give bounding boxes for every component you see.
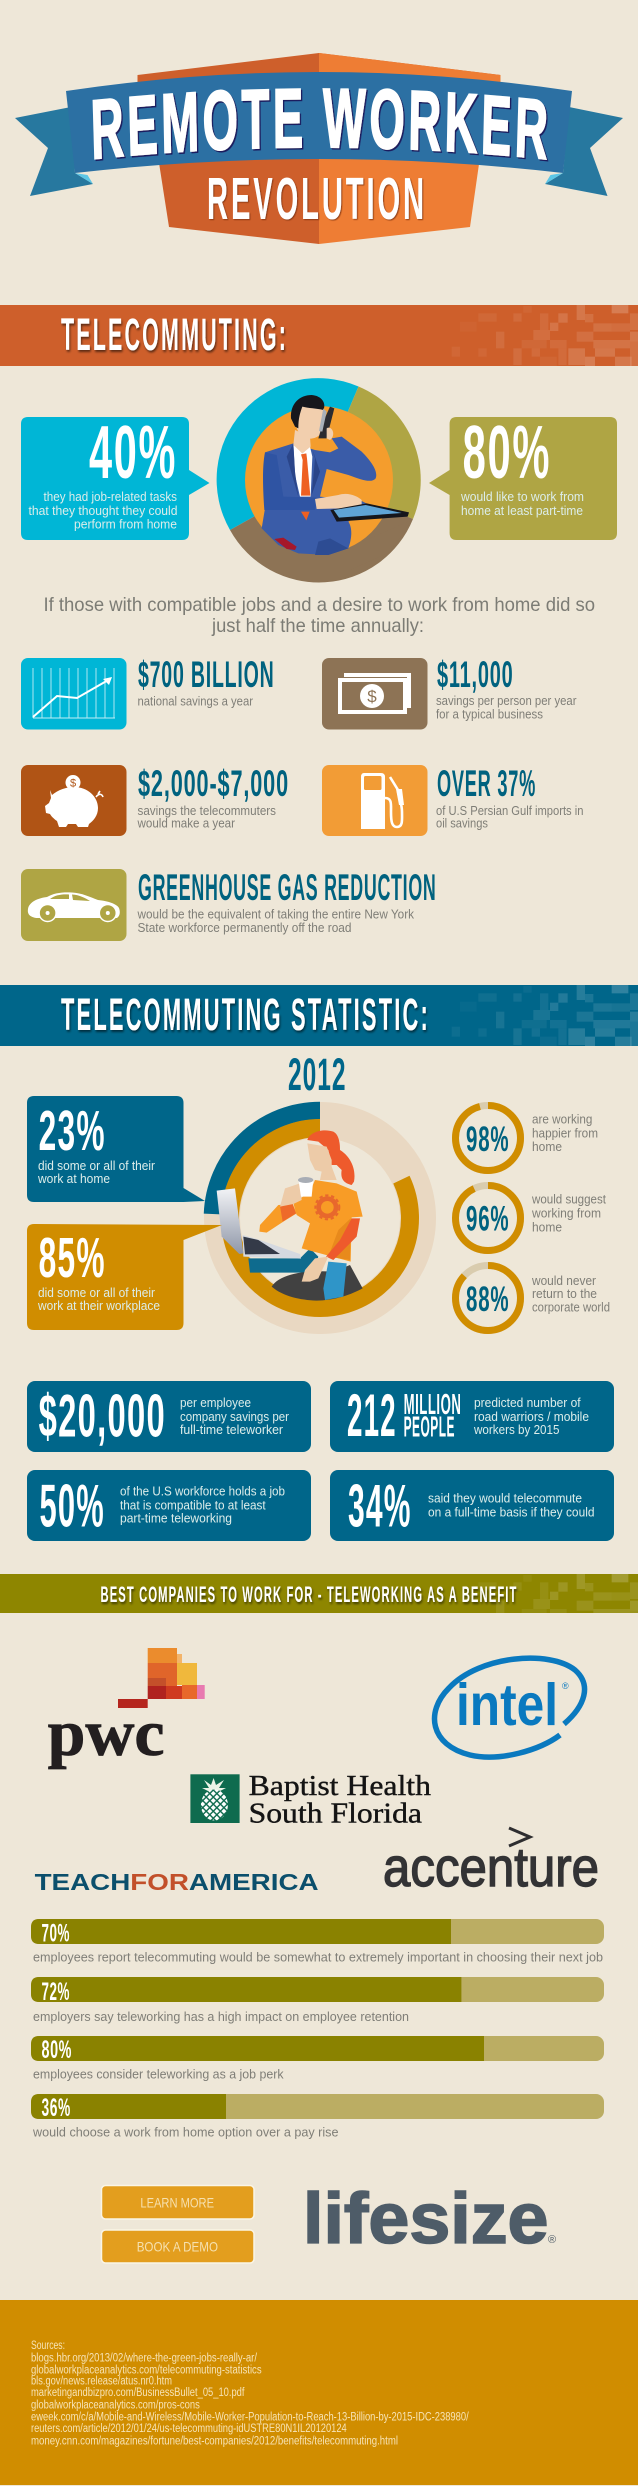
stat box: $20,000: per employee: [180, 1396, 251, 1410]
callout: 85%: work at their workplace: [37, 1299, 160, 1313]
section band: telecommuting statistic: [0, 985, 638, 1046]
bar: 36%: would choose a work from home option over a pay rise: [32, 2126, 339, 2140]
bar: 70%: 70%: [42, 1920, 70, 1948]
stat: $2,000-$7,000: [21, 763, 289, 836]
small donut: 96%: 96%: [466, 1200, 509, 1238]
icon: piggy bank: [21, 765, 126, 836]
small donut: 98%: home: [532, 1140, 562, 1154]
callout: 85%: [27, 1224, 222, 1330]
logo: lifesize: lifesize: [303, 2180, 548, 2259]
ribbon body: [66, 72, 572, 173]
icon: car: [21, 869, 126, 941]
stat: greenhouse gas reduction: [21, 867, 436, 941]
stat: $700 billion: [21, 654, 274, 730]
small donut: 96%: working from: [531, 1206, 601, 1220]
small donut: 96%: [456, 1186, 606, 1250]
stat box: 212 million people: PEOPLE: [404, 1412, 455, 1444]
icon: gas pump: [322, 765, 428, 836]
callout: 85%: did some or all of their: [38, 1286, 155, 1300]
small donut: 98%: 98%: [466, 1120, 509, 1159]
logo: pwc: [48, 1648, 205, 1770]
stat box: 50%: [27, 1470, 311, 1541]
bar: 80%: 80%: [42, 2036, 72, 2064]
bar: 70%: [31, 1919, 604, 1964]
stat: over 37%: OVER 37%: [437, 763, 536, 804]
icon: line chart: [21, 658, 126, 730]
small donut: 88%: return to the: [532, 1287, 597, 1301]
businessman illustration: [262, 395, 409, 555]
callout: 80%: would like to work from: [460, 490, 584, 504]
bar: 72%: employers say teleworking has a high impact on employee retention: [33, 2010, 409, 2024]
small donut: 98%: [456, 1106, 598, 1170]
callout: 80%: [429, 410, 617, 540]
orange badge: [138, 53, 500, 244]
button: book a demo: BOOK A DEMO: [137, 2238, 218, 2254]
stat: over 37%: oil savings: [436, 816, 488, 830]
small donut: 98%: are working: [532, 1112, 592, 1126]
stat: $11,000: [322, 654, 576, 730]
stat box: 34%: on a full-time basis if they could: [428, 1506, 595, 1520]
stat box: $20,000: full-time teleworker: [180, 1423, 283, 1437]
year heading: 2012: [288, 1049, 346, 1100]
stat box: 34%: said they would telecommute: [428, 1492, 582, 1506]
woman illustration: [217, 1130, 363, 1301]
stat box: 212 million people: MILLION: [404, 1389, 461, 1421]
icon: banknotes: [322, 658, 428, 730]
donut with woman at laptop: [212, 1110, 418, 1316]
small donut: 88%: [456, 1266, 610, 1330]
footer: sources: globalworkplaceanalytics.com/telecommuting-statistics: [31, 2364, 262, 2376]
bar: 80%: [31, 2036, 604, 2082]
stat: $2,000-$7,000: would make a year: [137, 816, 235, 830]
stat box: 50%: part-time teleworking: [120, 1512, 232, 1526]
bar: 36%: 36%: [42, 2094, 71, 2122]
logo: baptist health south florida: Baptist Health: [249, 1770, 432, 1802]
bar: 72%: 72%: [42, 1978, 70, 2006]
stat box: 212 million people: [330, 1381, 614, 1452]
footer: sources: eweek.com/c/a/Mobile-and-Wireless/Mobile-Worker-Population-to-Reach-13-Billion-by-2015-IDC-238980/: [31, 2412, 469, 2424]
logo: lifesize: ®: [548, 2234, 556, 2246]
stat: $700 billion: $700 BILLION: [138, 654, 274, 695]
bar: 80%: employees consider teleworking as a job perk: [33, 2068, 284, 2082]
stat: greenhouse gas reduction: State workforce permanently off the road: [138, 921, 352, 935]
stat: over 37%: of U.S Persian Gulf imports in: [436, 804, 584, 818]
intro paragraph: just half the time annually:: [211, 615, 424, 637]
stat: $2,000-$7,000: savings the telecommuters: [138, 804, 276, 818]
stat box: 50%: of the U.S workforce holds a job: [120, 1484, 285, 1498]
small donut: 88%: would never: [531, 1274, 596, 1288]
footer: sources: bls.gov/news.release/atus.nr0.htm: [31, 2376, 172, 2388]
ribbon tails: [15, 107, 623, 196]
intro paragraph: [44, 594, 595, 637]
title banner: [15, 53, 623, 244]
stat: $11,000: savings per person per year: [436, 694, 576, 708]
callout: 80%: 80%: [463, 410, 551, 494]
callout: 40%: that they thought they could: [28, 504, 178, 518]
callout: 40%: [21, 410, 210, 540]
stat: $700 billion: national savings a year: [138, 694, 253, 708]
callout: 23%: work at home: [37, 1172, 110, 1186]
logo: baptist health south florida: [190, 1770, 432, 1830]
callout: 40%: 40%: [89, 410, 177, 494]
stat: greenhouse gas reduction: would be the equivalent of taking the entire New York: [137, 908, 415, 922]
bar: 36%: [31, 2094, 604, 2140]
footer: sources: [0, 2300, 638, 2485]
stat box: 212 million people: predicted number of: [474, 1396, 581, 1410]
logo: baptist health south florida: South Florida: [249, 1798, 422, 1830]
bar: 70%: employees report telecommuting would be somewhat to extremely important in choosing their next job: [33, 1950, 603, 1964]
small donut: 96%: would suggest: [531, 1192, 606, 1206]
callout: 80%: home at least part-time: [461, 504, 583, 518]
button: learn more: LEARN MORE: [140, 2194, 214, 2210]
callout: 23%: 23%: [39, 1099, 106, 1163]
icon: piggy bank: $: [70, 778, 76, 790]
stat box: 50%: that is compatible to at least: [120, 1498, 266, 1512]
callout: 40%: they had job-related tasks: [44, 490, 177, 504]
stat box: $20,000: company savings per: [180, 1410, 289, 1424]
callout: 23%: [27, 1096, 205, 1202]
callout: 40%: perform from home: [74, 518, 177, 532]
stat box: 212 million people: workers by 2015: [473, 1423, 560, 1437]
footer: sources: money.cnn.com/magazines/fortune/best-companies/2012/benefits/telecommuting.html: [31, 2436, 398, 2448]
logo: pwc: pwc: [48, 1697, 165, 1770]
intro paragraph: If those with compatible jobs and a desire to work from home did so: [44, 594, 595, 616]
small donut: 96%: home: [532, 1220, 562, 1234]
callout: 23%: did some or all of their: [38, 1159, 155, 1173]
small donut: 88%: corporate world: [532, 1300, 610, 1314]
footer: sources: blogs.hbr.org/2013/02/where-the-green-jobs-really-ar/: [31, 2352, 258, 2364]
footer: sources: reuters.com/article/2012/01/24/us-telecommuting-idUSTRE80N1IL20120124: [31, 2423, 347, 2435]
stat: $11,000: $11,000: [437, 654, 514, 695]
footer: sources: Sources:: [31, 2340, 65, 2352]
bar: 72%: [31, 1977, 604, 2024]
logo: intel: [435, 1658, 585, 1757]
button: book a demo: [102, 2230, 254, 2263]
stat box: 50%: 50%: [40, 1472, 105, 1540]
stat box: 212 million people: 212: [347, 1382, 397, 1449]
stat box: 34%: 34%: [348, 1472, 412, 1540]
logo: intel: ®: [562, 1681, 569, 1691]
donut with businessman: [217, 378, 421, 582]
callout: 85%: 85%: [39, 1226, 106, 1290]
stat: over 37%: [322, 763, 584, 836]
stat: $2,000-$7,000: $2,000-$7,000: [138, 763, 289, 804]
small donut: 88%: 88%: [466, 1280, 509, 1319]
footer: sources: marketingandbizpro.com/BusinessBullet_05_10.pdf: [31, 2387, 245, 2399]
stat box: $20,000: $20,000: [39, 1382, 166, 1450]
logo: teach for america: TEACH FOR AMERICA: [35, 1869, 319, 1895]
small donut: 98%: happier from: [532, 1126, 598, 1140]
section band: telecommuting: TELECOMMUTING:: [61, 309, 288, 360]
stat box: 34%: [330, 1470, 614, 1541]
icon: banknotes: $: [367, 687, 377, 706]
section band: telecommuting: [0, 305, 638, 366]
section band: best companies: [0, 1574, 638, 1613]
logo: accenture: accenture: [383, 1836, 599, 1898]
stat: $11,000: for a typical business: [436, 708, 543, 722]
title: remote worker: REMOTE WORKER: [92, 88, 548, 162]
button: learn more: [102, 2186, 254, 2219]
footer: sources: globalworkplaceanalytics.com/pros-cons: [31, 2400, 200, 2412]
logo: intel: intel: [456, 1672, 558, 1738]
stat box: 212 million people: road warriors / mobile: [474, 1410, 589, 1424]
